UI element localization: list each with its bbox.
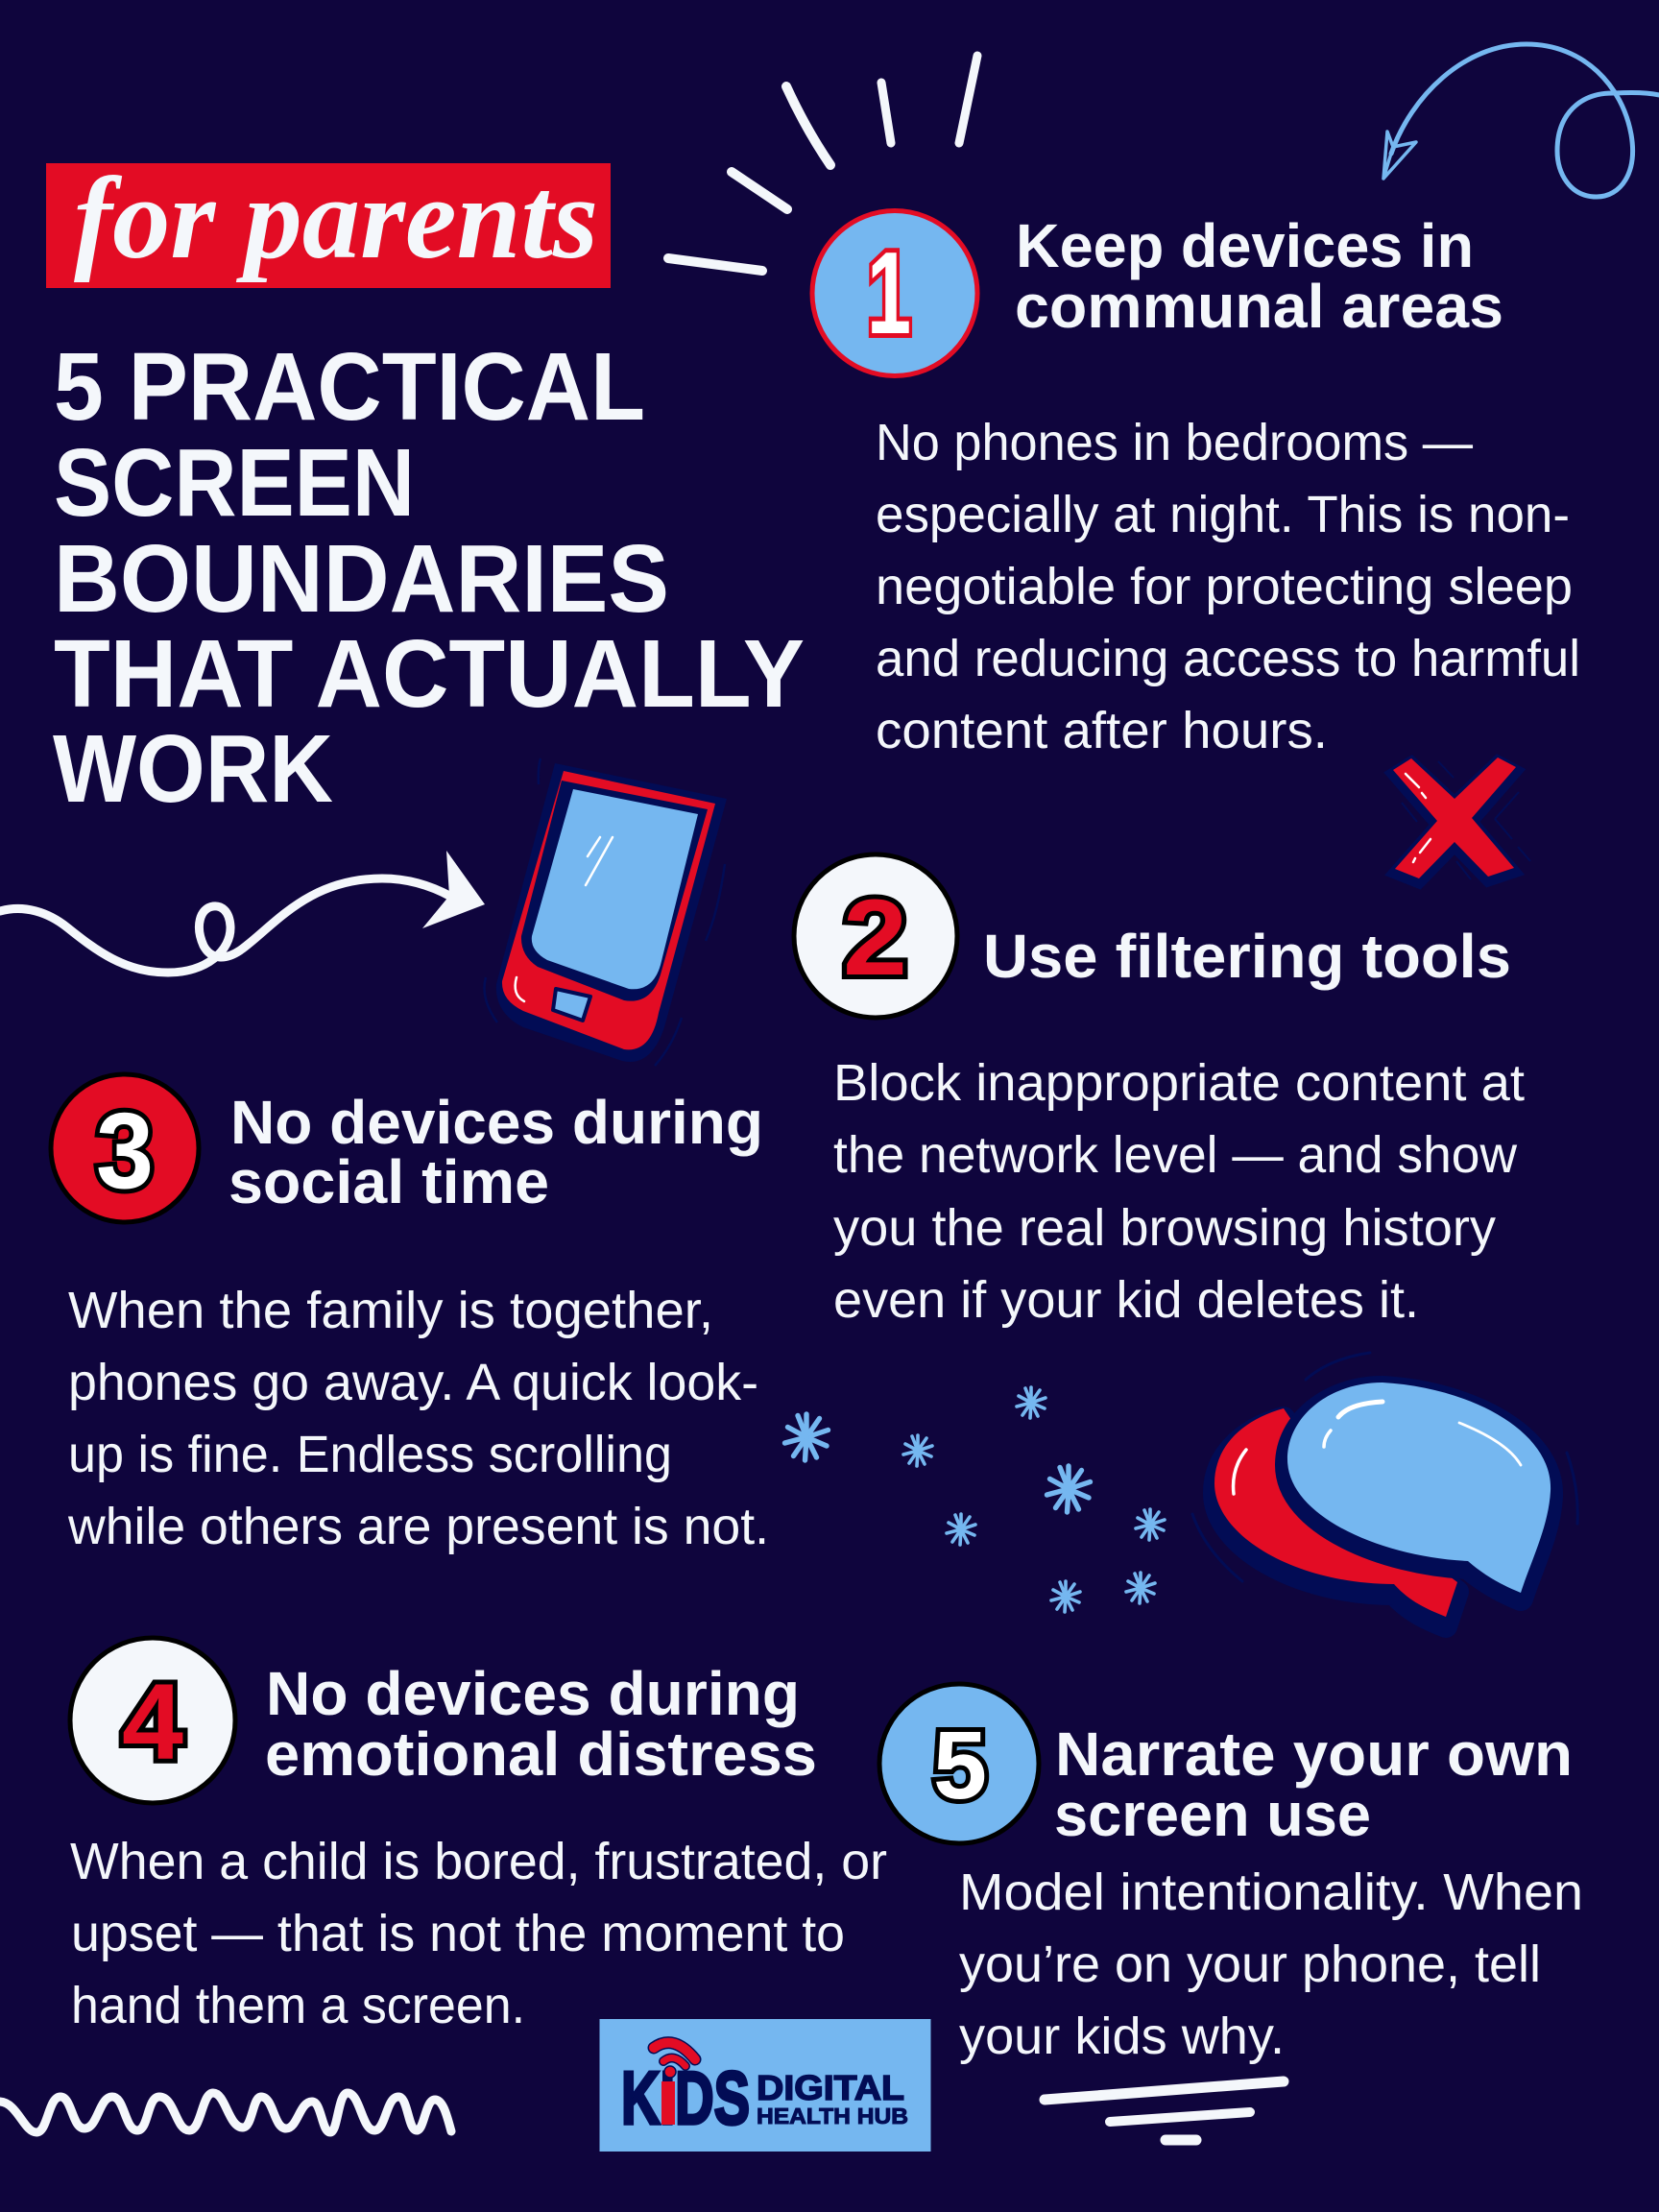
badge: number 4: 4 — [122, 1662, 183, 1782]
text: step 5 body: you’re on your phone, tell — [959, 1936, 1541, 1993]
panel: step 3 — [51, 1074, 769, 1555]
panel: step 1 — [812, 211, 1580, 759]
title: THAT ACTUALLY — [54, 620, 805, 728]
heading: step 4 — [265, 1659, 817, 1789]
heading: step 1: Keep devices in — [1016, 211, 1474, 280]
badge: number 4 — [70, 1638, 235, 1803]
badge: number 1 — [812, 211, 977, 376]
text: step 2 body: even if your kid deletes it. — [833, 1271, 1419, 1329]
icon: red phone — [484, 758, 727, 1066]
text: step 4 body: upset — that is not the moment to — [71, 1905, 845, 1962]
title: 5 PRACTICAL — [54, 333, 645, 441]
text: step 2 body — [833, 1054, 1525, 1329]
badge: number 2: 2 — [843, 878, 907, 998]
text: step 1 body: No phones in bedrooms — — [876, 414, 1473, 471]
arrow: white squiggle to phone — [0, 851, 485, 973]
text: step 1 body — [876, 414, 1580, 759]
text: step 3 body: while others are present is not. — [67, 1498, 769, 1555]
heading: step 1: communal areas — [1015, 272, 1503, 341]
heading: step 4: No devices during — [266, 1659, 800, 1728]
title — [53, 333, 805, 823]
text: step 3 body: When the family is together, — [68, 1282, 713, 1339]
text: step 1 body: especially at night. This is non- — [876, 486, 1570, 543]
heading: step 3 — [228, 1088, 763, 1216]
text: step 2 body: you the real browsing history — [833, 1199, 1496, 1257]
icon: red X — [1393, 757, 1530, 882]
title: BOUNDARIES — [54, 525, 669, 633]
text: step 2 body: Block inappropriate content at — [833, 1054, 1525, 1112]
heading: step 5: screen use — [1054, 1780, 1371, 1849]
badge: number 2 — [794, 854, 957, 1018]
text: step 1 body: negotiable for protecting sleep — [876, 558, 1573, 615]
badge: number 3 — [51, 1074, 199, 1222]
badge: number 5 — [879, 1684, 1039, 1843]
badge: number 1: 1 — [867, 228, 911, 358]
icon: burst lines — [668, 56, 977, 271]
text: step 1 body: content after hours. — [876, 702, 1328, 759]
badge: number 3: 3 — [96, 1091, 154, 1211]
title: WORK — [53, 715, 333, 823]
icon: sparkle stars — [785, 1387, 1165, 1612]
text: step 3 body — [67, 1282, 769, 1555]
badge: for parents: for parents — [74, 154, 598, 283]
icon: wifi arcs — [654, 2043, 695, 2066]
heading: step 5: Narrate your own — [1055, 1719, 1573, 1789]
text: step 3 body: up is fine. Endless scrolling — [68, 1426, 672, 1483]
panel: step 4 — [70, 1638, 887, 2034]
heading: step 2: Use filtering tools — [983, 922, 1511, 991]
panel: step 2 — [794, 854, 1525, 1329]
heading: step 1 — [1015, 211, 1503, 341]
heading: step 4: emotional distress — [265, 1719, 817, 1789]
text: step 4 body: hand them a screen. — [71, 1977, 525, 2034]
heading: step 3: social time — [228, 1147, 549, 1216]
arrow: blue curl — [1383, 44, 1659, 197]
text: step 4 body — [70, 1833, 887, 2034]
text: step 1 body: and reducing access to harmful — [876, 630, 1580, 687]
text: step 5 body — [959, 1863, 1583, 2065]
title: SCREEN — [54, 429, 415, 537]
badge: number 5: 5 — [933, 1712, 987, 1819]
heading: step 5 — [1054, 1719, 1573, 1849]
icon: speech bubbles — [1192, 1353, 1577, 1626]
text: step 3 body: phones go away. A quick look- — [68, 1354, 758, 1411]
decoration: white zigzag — [0, 2093, 451, 2132]
text: step 5 body: your kids why. — [959, 2008, 1285, 2065]
logo: Kids Digital Health Hub — [599, 2019, 931, 2152]
text: step 5 body: Model intentionality. When — [959, 1863, 1583, 1921]
heading: step 3: No devices during — [230, 1088, 763, 1157]
logo: Kids Digital Health Hub: KIDS — [621, 2056, 750, 2140]
logo: Kids Digital Health Hub: DIGITAL — [757, 2068, 904, 2107]
text: step 4 body: When a child is bored, frustrated, or — [70, 1833, 887, 1890]
text: step 2 body: the network level — and show — [833, 1126, 1518, 1184]
decoration: underline strokes — [1045, 2081, 1284, 2140]
logo: Kids Digital Health Hub: HEALTH HUB — [757, 2104, 908, 2128]
panel: step 5 — [879, 1684, 1583, 2065]
